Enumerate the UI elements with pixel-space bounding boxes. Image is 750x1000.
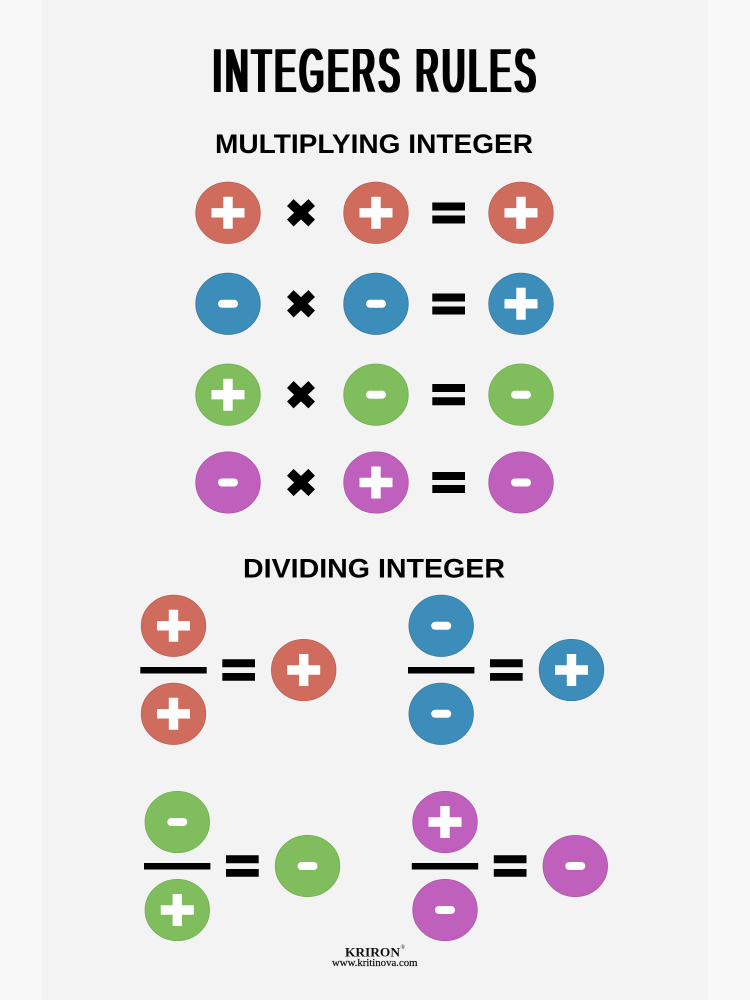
icon: pink plus [413,791,477,853]
icon: green minus [489,364,553,425]
fraction bar [412,863,478,870]
section: dividing rules [140,595,608,941]
icon: pink minus [413,879,477,941]
icon: blue minus [344,273,408,334]
icon: pink minus [196,452,260,513]
icon: green plus [145,879,210,941]
logo wordmark: KRIRON [345,946,400,960]
icon: red plus [141,683,206,744]
icon: red plus [196,182,260,244]
heading: dividing integer: DIVIDING INTEGER [243,554,505,584]
website: www.kritinova.com [332,958,418,969]
row: positive times negative equals negative [196,364,553,425]
icon: equals [490,659,523,681]
icon: red plus [344,182,408,244]
icon: pink minus [489,452,553,513]
row: negative times negative equals positive [196,273,553,334]
icon: times [290,203,312,223]
icon: green minus [275,835,340,897]
icon: pink plus [344,452,408,513]
section: multiplying rules [196,182,553,513]
icon: blue plus [489,273,553,334]
fraction bar [408,667,474,674]
icon: pink minus [543,835,608,897]
icon: blue plus [539,639,604,701]
icon: green minus [145,791,210,853]
fraction: positive over positive equals positive [140,595,336,744]
icon: red plus [141,595,206,656]
icon: equals [432,202,465,224]
fraction bar [144,863,210,870]
icon: times [290,294,312,314]
fraction: negative over negative equals positive [408,595,604,744]
icon: times [290,384,312,405]
logo: Kriron and website [332,944,418,969]
icon: equals [494,855,526,877]
icon: equals [222,659,255,681]
icon: equals [226,855,259,877]
icon: blue minus [409,683,474,744]
icon: times [290,472,312,493]
fraction: negative over positive equals negative [144,791,340,941]
icon: green plus [196,364,260,425]
title: INTEGERS RULES [213,38,539,106]
icon: blue minus [409,595,474,656]
icon: equals [432,294,465,314]
registered mark: ® [400,944,406,951]
icon: equals [432,384,465,405]
icon: red plus [271,639,336,701]
icon: equals [432,472,465,493]
icon: blue minus [196,273,260,334]
fraction: positive over negative equals negative [412,791,608,941]
icon: red plus [489,182,553,244]
row: negative times positive equals negative [196,452,553,513]
heading: multiplying integer: MULTIPLYING INTEGER [215,129,533,159]
icon: green minus [344,364,408,425]
fraction bar [140,667,207,674]
row: positive times positive equals positive [196,182,553,244]
